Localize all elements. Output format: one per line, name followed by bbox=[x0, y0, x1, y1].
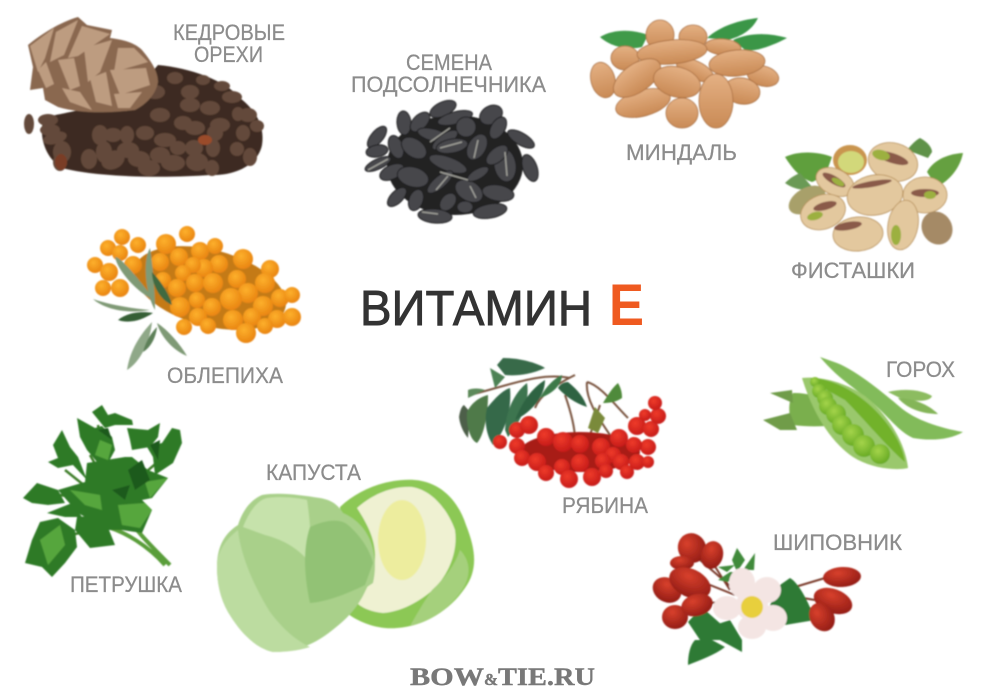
footer: source bbox=[410, 664, 595, 691]
food: parsley bbox=[23, 405, 182, 577]
food: sea buckthorn bbox=[87, 226, 301, 370]
label: pine nuts bbox=[173, 20, 285, 67]
footer: source: & bbox=[484, 670, 498, 689]
label: pine nuts: ОРЕХИ bbox=[194, 42, 263, 67]
label: pistachios: ФИСТАШКИ bbox=[791, 258, 915, 283]
food: rose hip bbox=[648, 528, 861, 665]
title: vitamin E: ВИТАМИН bbox=[360, 282, 592, 336]
food: almonds bbox=[587, 18, 787, 128]
food: pine nuts with cone bbox=[24, 17, 264, 177]
food: sunflower seeds bbox=[363, 97, 541, 224]
label: sea buckthorn: ОБЛЕПИХА bbox=[167, 363, 283, 388]
label: sunflower seeds bbox=[351, 50, 546, 97]
label: cabbage: КАПУСТА bbox=[266, 460, 361, 485]
footer: source: BOW bbox=[410, 664, 484, 691]
label: parsley: ПЕТРУШКА bbox=[70, 572, 182, 597]
food: rowan bbox=[459, 358, 666, 488]
label: rowan: РЯБИНА bbox=[562, 493, 648, 518]
footer: source: TIE.RU bbox=[498, 664, 595, 691]
food: pistachios bbox=[784, 137, 963, 253]
label: sunflower seeds: ПОДСОЛНЕЧНИКА bbox=[351, 72, 546, 97]
label: almonds: МИНДАЛЬ bbox=[626, 140, 737, 165]
label: pine nuts: КЕДРОВЫЕ bbox=[173, 20, 285, 45]
label: sunflower seeds: СЕМЕНА bbox=[406, 50, 492, 75]
title: vitamin E: Е bbox=[609, 273, 644, 338]
food: cabbage bbox=[217, 480, 474, 652]
food: peas bbox=[763, 357, 963, 469]
label: peas: ГОРОХ bbox=[886, 357, 955, 382]
label: rose hip: ШИПОВНИК bbox=[773, 530, 902, 555]
